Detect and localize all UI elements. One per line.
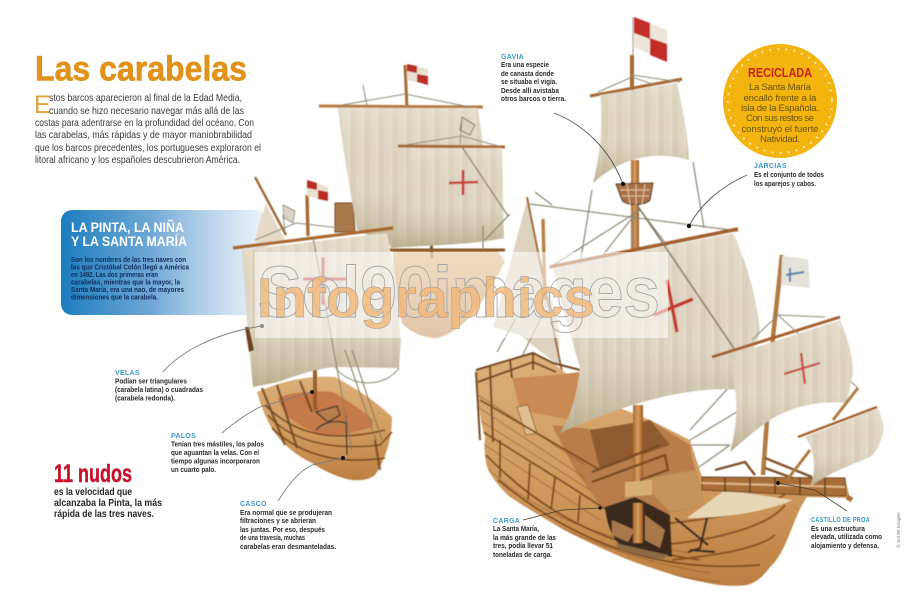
fore sail cross [784, 353, 820, 384]
topsail [593, 83, 689, 183]
label: palos: un cuarto palo. [171, 466, 216, 474]
jib lateen sail [493, 197, 562, 372]
Niña cross [449, 170, 478, 195]
label: palos: que aguantan la velas. Con el [171, 449, 259, 457]
label: velas: Podían ser triangulares [115, 378, 187, 386]
ship: la Niña (back) [319, 64, 510, 338]
label: castillo de proa: elevada, utilizada como [811, 533, 883, 541]
ship: la Pinta (front left) [233, 177, 401, 480]
copyright: © Sol 90 Images [895, 512, 902, 548]
anchor [675, 518, 715, 552]
topsail yard [590, 79, 682, 96]
title: Las carabelas [35, 50, 247, 88]
label: jarcias: JARCIAS [754, 163, 787, 170]
callout: Reciclada: encalló frente a la [744, 93, 817, 104]
label: carga: tres, podía llevar 51 [493, 542, 553, 550]
Pinta deck fittings [315, 370, 316, 410]
label: casco: filtraciones y se abrieran [240, 517, 316, 525]
callout: Reciclada: RECICLADA [748, 65, 813, 80]
callout: Reciclada: Con sus restos se [746, 113, 814, 124]
callout: Reciclada: isla de la Española. [741, 103, 819, 114]
panel text: carabelas, mientras que la mayor, la [71, 280, 180, 286]
stat: 11 nudos: es la velocidad que [54, 487, 132, 498]
leader: palos [222, 390, 314, 433]
fore yard [712, 317, 840, 357]
forecastle [702, 477, 846, 496]
Niña stern castle [335, 203, 355, 232]
watermark band [255, 252, 668, 338]
Niña mast [405, 65, 407, 108]
stat: 11 nudos: alcanzaba la Pinta, la más [54, 498, 162, 509]
panel heading: LA PINTA, LA NIÑA [71, 220, 184, 235]
ship: la Santa María (right) [476, 17, 883, 586]
label: casco [240, 501, 336, 551]
callout: Reciclada [723, 44, 837, 158]
Pinta yard [233, 228, 393, 248]
label: gavia: de canasta donde [501, 70, 554, 78]
label: velas: VELAS [115, 370, 140, 377]
deck rail [592, 445, 668, 482]
label: palos: Tenían tres mástiles, los palos [171, 440, 264, 448]
callout: Reciclada: construyó el fuerte [742, 124, 818, 135]
label: casco: carabelas eran desmanteladas. [240, 543, 336, 551]
label: jarcias [754, 163, 824, 188]
cargo hold [605, 497, 672, 557]
hull strakes [478, 395, 790, 582]
label: carga: la más grande de las [493, 534, 556, 542]
panel text: en 1492. Las dos primeras eran [71, 272, 158, 279]
Pinta planks [265, 405, 392, 460]
mast base [625, 480, 652, 497]
waist deck [552, 420, 705, 520]
label: gavia: Desde allí avistaba [501, 87, 559, 95]
Pinta stern post [245, 327, 254, 352]
label: casco: las juntas. Por eso, después [240, 526, 325, 534]
label: velas [115, 370, 203, 402]
main mast lower [633, 405, 643, 483]
main sail [553, 233, 760, 433]
panel text: dimensiones que la carabela. [71, 294, 158, 302]
leader: castillo de proa [776, 481, 847, 511]
upper mast [630, 55, 634, 90]
label: carga [493, 518, 556, 559]
label: gavia: GAVIA [501, 54, 524, 61]
Niña hull [393, 250, 505, 338]
stern rail [476, 353, 580, 442]
main hull [476, 255, 852, 586]
intro text [34, 91, 261, 166]
leader: casco [278, 456, 345, 501]
drop cap: E [34, 91, 51, 119]
top flag [633, 17, 667, 62]
Niña flag small [460, 117, 475, 135]
foremast [763, 255, 782, 475]
label: velas: (carabela latina) o cuadradas [115, 386, 203, 394]
label: casco: CASCO [240, 501, 267, 508]
main yard [550, 229, 738, 267]
leader: gavia [554, 113, 625, 186]
rigging [497, 162, 742, 470]
panel text: Son los nombres de las tres naves con [71, 257, 186, 264]
main sail cross [654, 280, 693, 332]
bow planking light [687, 490, 793, 518]
Niña flag [407, 64, 428, 85]
label: carga: CARGA [493, 518, 520, 525]
crow's nest [616, 183, 653, 205]
foremast flag [781, 256, 810, 288]
forecastle rail back [715, 458, 812, 485]
Niña rear sail [338, 108, 490, 248]
Pinta cross [303, 257, 346, 305]
Pinta lateen spar [255, 177, 286, 235]
callout: Reciclada: Natividad. [760, 134, 800, 145]
Pinta small flag [283, 205, 295, 223]
watermark: Sol90images: Sol90images [258, 253, 660, 333]
label: casco: Era normal que se produjeran [240, 509, 332, 517]
label: palos: PALOS [171, 433, 196, 440]
panel: la Pinta, la Niña y la Santa María [61, 210, 266, 315]
label: palos [171, 433, 264, 474]
panel: la Pinta, la Niña y la Santa María: Y LA SANTA MARÍA [71, 234, 187, 249]
intro text: costas para adentrarse en la profundidad del océano. Con [35, 118, 254, 129]
Niña front sail [390, 148, 504, 248]
Pinta main sail [242, 233, 401, 387]
stern castle interior [512, 372, 580, 420]
label: jarcias: Es el conjunto de todos [754, 171, 824, 179]
intro text: las carabelas, más rápidas y de mayor maniobrabilidad [35, 130, 252, 141]
bowsprit sail [805, 408, 883, 487]
Pinta flag [307, 180, 328, 201]
intro text: stos barcos aparecieron al final de la Edad Media, [49, 93, 242, 104]
label: jarcias: los aparejos y cabos. [754, 180, 816, 188]
leader: jarcias [687, 175, 747, 228]
label: velas: (carabela redonda). [115, 394, 175, 402]
label: castillo de proa: alojamiento y defensa. [811, 542, 879, 550]
leader: carga [523, 506, 602, 520]
intro text: que los barcos precedentes, los portugueses exploraron el [35, 143, 261, 154]
stat: 11 nudos [54, 460, 162, 520]
label: castillo de proa: Es una estructura [811, 525, 865, 533]
stern stair [517, 405, 537, 435]
label: carga: toneladas de carga. [493, 551, 552, 559]
Niña rear yard [319, 106, 483, 107]
watermark: Infographics: Infographics [257, 266, 595, 329]
fore sail [727, 320, 853, 452]
panel text [71, 257, 189, 302]
panel text: las que Cristóbal Colón llegó a América [71, 264, 189, 272]
Pinta hull [257, 370, 392, 480]
intro text: cuando se hizo necesario navegar más allá de las [49, 106, 244, 117]
label: palos: tiempo algunas incorporaron [171, 458, 260, 466]
Pinta rigging [313, 237, 382, 450]
label: carga: La Santa María, [493, 525, 539, 533]
Pinta lateen sail [255, 204, 285, 250]
label: castillo de proa [811, 517, 883, 550]
panel text: Santa María, era una nao, de mayores [71, 287, 184, 294]
stat: 11 nudos: 11 nudos [54, 460, 132, 488]
stat: 11 nudos: rápida de las tres naves. [54, 509, 154, 520]
bowsprit [787, 388, 858, 480]
Niña front yard [398, 146, 505, 147]
leader: velas [163, 324, 264, 372]
label: gavia: otros barcos o tierra. [501, 95, 566, 103]
upper mast 2 [631, 160, 639, 250]
callout: Reciclada: La Santa María [749, 82, 812, 93]
label: gavia [501, 54, 566, 103]
label: gavia: Era una especie [501, 61, 549, 69]
Pinta deck [278, 391, 373, 437]
label: castillo de proa: CASTILLO DE PROA [811, 517, 870, 524]
intro text: litoral africano y los españoles descubrieron América. [35, 155, 240, 166]
label: gavia: se situaba el vigía. [501, 78, 557, 86]
Pinta main mast [307, 195, 308, 236]
label: casco: de una travesía, muchas [240, 534, 305, 542]
